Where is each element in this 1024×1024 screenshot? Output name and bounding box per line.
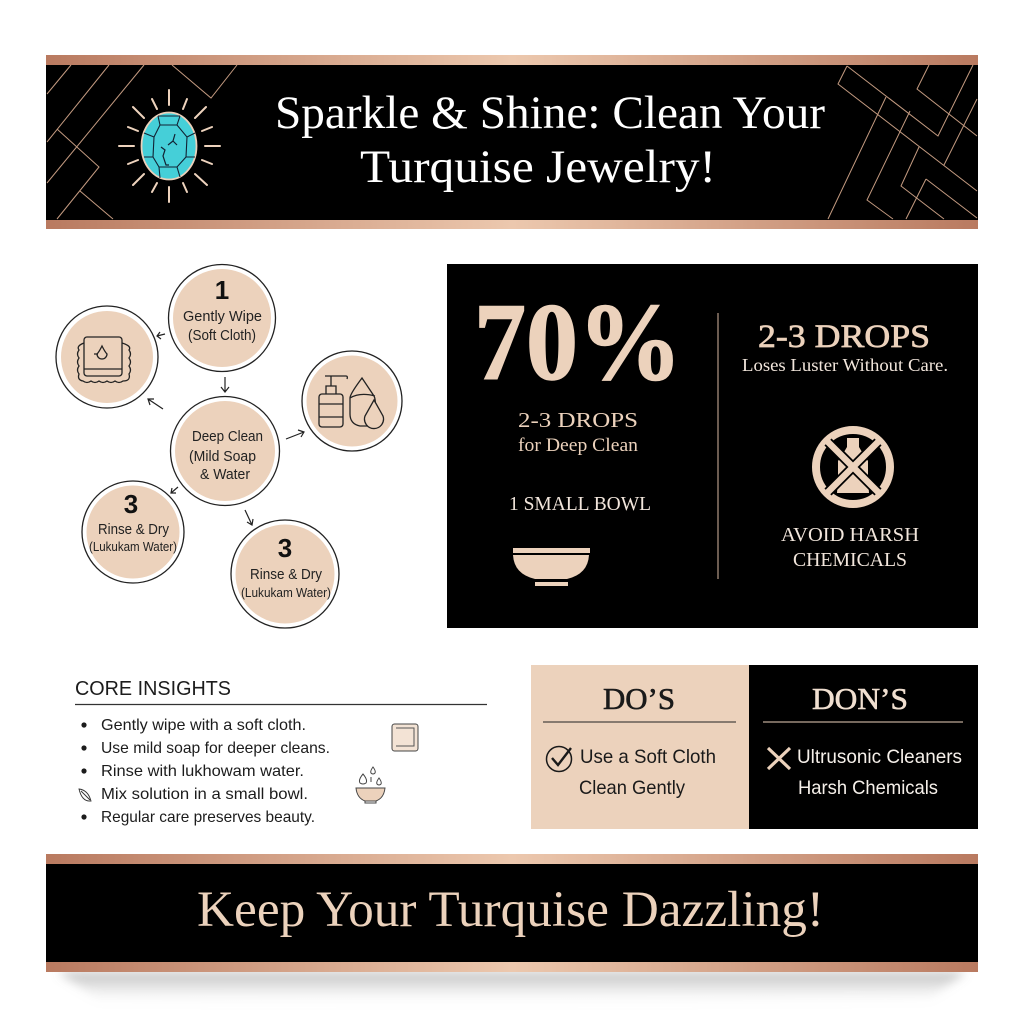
icon: soap and drops	[319, 376, 383, 429]
step 1 circle: Gently Wipe	[183, 308, 262, 325]
panel: do's	[531, 665, 749, 829]
footer banner: Keep Your Turquise Dazzling!	[197, 882, 824, 938]
rinse circle left	[82, 481, 184, 583]
label: avoid harsh chemicals: AVOID HARSH	[781, 524, 919, 546]
core insights heading: CORE INSIGHTS	[75, 678, 231, 700]
icon: bowl	[513, 548, 590, 586]
soap circle	[302, 351, 402, 451]
step 1 circle: 1	[215, 275, 229, 305]
stat: loses luster	[742, 319, 948, 375]
title: Turquise Jewelry!	[360, 141, 716, 193]
stat: 70 percent: 70%	[474, 281, 682, 403]
step 1 circle: (Soft Cloth)	[188, 327, 256, 344]
insights list	[79, 717, 330, 826]
rinse circle right: (Lukukam Water)	[241, 586, 331, 600]
panel: don'ts	[749, 665, 978, 829]
panel: do's: Use a Soft Cloth	[580, 746, 716, 768]
footer shadow	[58, 972, 966, 1003]
rinse circle left: 3	[124, 489, 138, 519]
icon: turquoise gem	[119, 90, 220, 202]
icon: cloth with drop	[78, 337, 130, 382]
insights list: Mix solution in a small bowl.	[101, 786, 308, 803]
panel: don'ts: DON’S	[812, 681, 908, 716]
rinse circle right: Rinse & Dry	[250, 566, 322, 583]
deep clean circle: (Mild Soap	[189, 448, 256, 465]
process flow	[56, 264, 402, 628]
footer banner	[46, 854, 978, 972]
step 1 circle	[168, 264, 276, 372]
rinse circle left: (Lukukam Water)	[89, 540, 177, 554]
panel: do's: DO’S	[603, 681, 675, 716]
deep clean circle: Deep Clean	[192, 428, 263, 445]
stat: small bowl: 1 SMALL BOWL	[509, 493, 651, 515]
stat: loses luster: Loses Luster Without Care.	[742, 355, 948, 375]
insights list: Regular care preserves beauty.	[101, 809, 315, 826]
rinse circle right: 3	[278, 533, 292, 563]
header banner	[46, 55, 978, 229]
label: avoid harsh chemicals	[781, 524, 919, 571]
deep clean circle	[170, 396, 280, 506]
stat: drops for deep clean	[518, 408, 639, 456]
title: Sparkle & Shine: Clean Your	[275, 87, 825, 139]
label: avoid harsh chemicals: CHEMICALS	[793, 549, 907, 571]
panel: don'ts: Harsh Chemicals	[798, 777, 938, 799]
panel: don'ts: Ultrusonic Cleaners	[797, 746, 962, 768]
insights list: Use mild soap for deeper cleans.	[101, 740, 330, 757]
deep clean circle: & Water	[200, 466, 250, 483]
stat: drops for deep clean: 2-3 DROPS	[518, 408, 638, 432]
stat: drops for deep clean: for Deep Clean	[518, 435, 639, 456]
insights list: Gently wipe with a soft cloth.	[101, 717, 306, 734]
rinse circle right	[231, 520, 339, 628]
cloth circle	[56, 306, 158, 408]
icon: no harsh chemicals	[816, 430, 890, 504]
icon: cross	[768, 748, 790, 769]
icon: check	[546, 746, 572, 772]
panel: do's: Clean Gently	[579, 777, 685, 799]
icon: small bowl with drops	[356, 767, 385, 803]
insights list: Rinse with lukhowam water.	[101, 763, 304, 780]
stats panel	[447, 264, 978, 628]
core insights	[75, 678, 487, 826]
rinse circle left: Rinse & Dry	[98, 521, 169, 538]
stat: loses luster: 2-3 DROPS	[758, 319, 930, 355]
icon: small cloth	[392, 724, 418, 751]
title	[275, 87, 825, 193]
flow arrows	[148, 332, 304, 525]
